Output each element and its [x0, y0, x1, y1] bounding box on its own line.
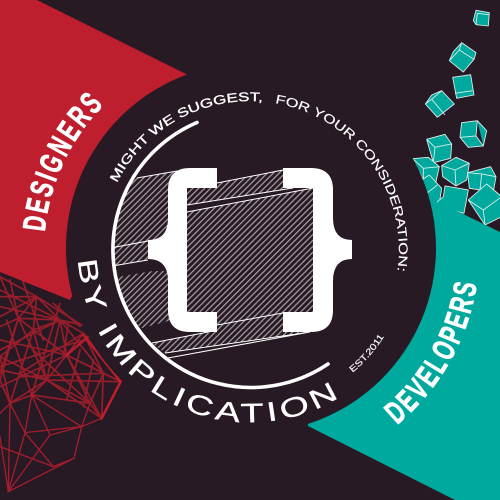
hatch: bottom band	[152, 312, 310, 353]
cube 7	[413, 157, 439, 182]
heading: designers: DESIGNERS	[22, 92, 102, 231]
hatch: lower left face	[118, 271, 170, 328]
cube 9	[468, 167, 496, 192]
heading: developers: DEVELOPERS	[383, 282, 476, 425]
hatch: upper left face	[114, 172, 174, 246]
cube 1	[473, 10, 489, 26]
right bracket	[283, 168, 352, 332]
bright edge along the circle	[67, 335, 121, 418]
text: might we suggest: MIGHT WE SUGGEST,	[110, 92, 262, 182]
panel: red designers shape	[0, 0, 188, 300]
dark central circle	[66, 63, 436, 433]
cube 2	[449, 43, 476, 72]
perspective lines	[100, 170, 313, 358]
teal filler behind lower cubes	[413, 159, 442, 213]
left bracket	[148, 168, 217, 332]
hatch: top band	[187, 170, 293, 205]
cube cluster	[413, 10, 500, 225]
text: by implication: BY IMPLICATION	[78, 260, 337, 422]
icon: curly brackets logo	[148, 168, 352, 332]
hatch: left band	[114, 242, 148, 265]
network mesh graphic	[0, 273, 121, 492]
cube 10	[468, 184, 500, 225]
cube 8	[442, 157, 469, 186]
cube 12	[422, 175, 442, 213]
circle arc	[113, 122, 328, 388]
dense upper mesh	[0, 273, 121, 418]
panel: teal developers shape	[300, 190, 500, 500]
hatch: main square	[187, 188, 313, 312]
cube 5	[460, 121, 487, 147]
text: for your consideration: FOR YOUR CONSIDERATION:	[276, 94, 408, 271]
text: established 2011: EST.2011	[349, 335, 384, 372]
cube 3	[453, 75, 474, 98]
cube 6	[427, 134, 452, 163]
cube 11	[437, 186, 468, 213]
cube 4	[425, 91, 454, 117]
sparse lower mesh	[0, 395, 102, 492]
hatched perspective shapes	[100, 170, 313, 358]
